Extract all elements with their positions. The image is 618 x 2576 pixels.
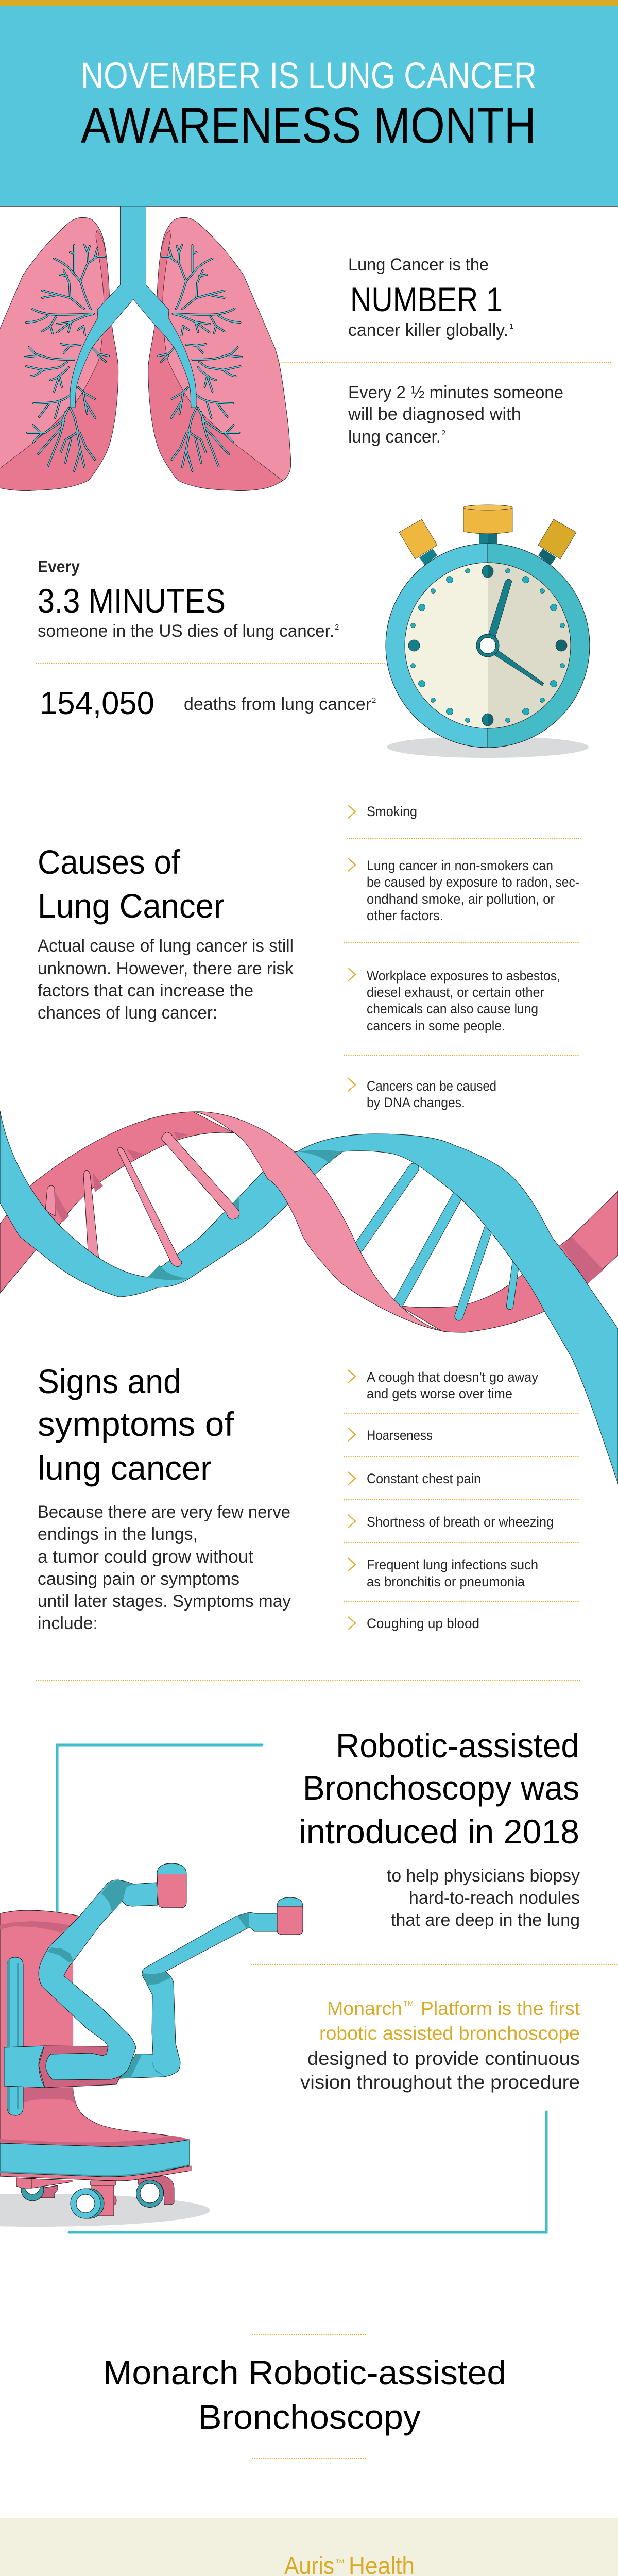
text: Monarch platform: robotic assisted bronchoscope [319, 2023, 580, 2044]
wheel back [16, 2178, 72, 2201]
list item: non-smokers: other factors. [367, 908, 443, 923]
heading: signs and symptoms: lung cancer [38, 1449, 212, 1487]
text: number 1 cancer killer: NUMBER 1 [350, 280, 503, 318]
text: every 3.3 minutes: 3.3 MINUTES [38, 582, 226, 620]
text: to help physicians: hard-to-reach nodules [409, 1888, 580, 1908]
heading: Monarch robotic-assisted bronchoscopy: Monarch Robotic-assisted [103, 2353, 506, 2392]
title: NOVEMBER IS LUNG CANCER [81, 56, 537, 96]
illustration: DNA helix [0, 1111, 618, 1484]
text: every 2.5 minutes: Every 2 ½ minutes someone [348, 383, 563, 402]
text: every 2.5 minutes: will be diagnosed with [348, 404, 521, 424]
text: to help physicians: that are deep in the lung [391, 1910, 580, 1930]
symptom: hoarseness: Hoarseness [367, 1428, 433, 1443]
panel: Auris Health [0, 2518, 618, 2576]
symptom: shortness of breath: Shortness of breath or wheezing [367, 1514, 554, 1530]
symptoms list [344, 1369, 579, 1631]
list item: DNA changes: by DNA changes. [367, 1095, 465, 1110]
symptom: lung infections: as bronchitis or pneumonia [367, 1574, 525, 1589]
list item: workplace exposures: diesel exhaust, or certain other [367, 985, 544, 1000]
text: causes intro [38, 936, 294, 1023]
text: Monarch platform: Monarch [327, 1998, 402, 2019]
text: Monarch platform: designed to provide continuous [307, 2048, 580, 2069]
icon: stopwatch [386, 505, 590, 758]
text: every 3.3 minutes [38, 557, 339, 641]
robot base [0, 2140, 191, 2181]
heading: signs and symptoms: symptoms of [38, 1405, 234, 1443]
table [4, 2046, 136, 2088]
text: signs intro: causing pain or symptoms [38, 1569, 239, 1589]
text: deaths statistic: 2 [372, 696, 376, 705]
text: signs intro: endings in the lungs, [38, 1524, 198, 1544]
list item: DNA changes [348, 1078, 496, 1110]
symptom: lung infections: Frequent lung infections such [367, 1557, 538, 1572]
list item: smoking: Smoking [367, 804, 417, 819]
heading: causes of lung cancer: Lung Cancer [38, 887, 225, 925]
heading: signs and symptoms [38, 1362, 234, 1487]
text: to help physicians [387, 1866, 580, 1930]
heading: Monarch robotic-assisted bronchoscopy [103, 2353, 506, 2436]
text: every 3.3 minutes: Every [38, 557, 80, 576]
illustration: robot [0, 1863, 303, 2227]
text: causes intro: Actual cause of lung cancer is still [38, 936, 294, 956]
text: every 2.5 minutes: lung cancer. [348, 427, 441, 447]
list item: non-smokers: Lung cancer in non-smokers can [367, 858, 553, 873]
text: signs intro [38, 1502, 291, 1633]
heading: robotic-assisted bronchoscopy introduced: introduced in 2018 [299, 1812, 579, 1851]
illustration: lungs [0, 206, 291, 490]
text: every 3.3 minutes: 2 [335, 623, 339, 632]
text: every 2.5 minutes: 2 [441, 429, 445, 437]
list item: non-smokers: ondhand smoke, air pollution, or [367, 891, 555, 907]
wheel right [136, 2176, 174, 2207]
symptom: chest pain: Constant chest pain [367, 1471, 481, 1486]
robot body [0, 1910, 189, 2147]
list item: non-smokers [348, 858, 579, 923]
text: causes intro: chances of lung cancer: [38, 1003, 217, 1023]
wheel front [71, 2181, 116, 2218]
list item: smoking [348, 804, 417, 819]
text: Monarch platform [300, 1998, 580, 2093]
title banner [0, 6, 618, 206]
list item: workplace exposures: chemicals can also cause lung [367, 1001, 538, 1016]
symptom: cough: A cough that doesn't go away [367, 1369, 538, 1385]
list item: DNA changes: Cancers can be caused [367, 1078, 496, 1094]
text: deaths statistic: 154,050 [40, 686, 154, 721]
text: Auris launched [284, 2552, 491, 2576]
symptom: coughing up blood: Coughing up blood [367, 1616, 479, 1631]
text: signs intro: a tumor could grow without [38, 1547, 254, 1567]
arm: left [39, 1863, 186, 2080]
text: signs intro: include: [38, 1614, 98, 1633]
title: AWARENESS MONTH [81, 97, 536, 154]
symptom: cough: and gets worse over time [367, 1386, 512, 1401]
text: Monarch platform: TM [403, 1999, 414, 2007]
text: signs intro: Because there are very few nerve [38, 1502, 290, 1522]
text: deaths statistic: deaths from lung cancer [184, 694, 371, 714]
bracket line: robot top [57, 1745, 262, 1912]
list item: workplace exposures [348, 968, 560, 1033]
text: signs intro: until later stages. Symptoms may [38, 1591, 291, 1611]
text: deaths statistic [40, 686, 376, 721]
heading: Monarch robotic-assisted bronchoscopy: Bronchoscopy [198, 2398, 421, 2436]
text: to help physicians: to help physicians biopsy [387, 1866, 580, 1886]
text: number 1 cancer killer: 1 [509, 322, 513, 331]
list item: workplace exposures: cancers in some people. [367, 1018, 505, 1033]
arm: right [120, 1897, 303, 2078]
list item: non-smokers: be caused by exposure to radon, sec- [367, 874, 579, 890]
text: Monarch platform: vision throughout the procedure [300, 2072, 580, 2093]
text: number 1 cancer killer: cancer killer globally. [348, 320, 508, 340]
symptom: cough [348, 1369, 538, 1401]
heading: robotic-assisted bronchoscopy introduced: Bronchoscopy was [303, 1769, 579, 1807]
title [81, 56, 537, 154]
heading: causes of lung cancer [38, 843, 225, 925]
text: causes intro: factors that can increase the [38, 981, 253, 1001]
text: causes intro: unknown. However, there are risk [38, 959, 294, 978]
text: every 2.5 minutes [348, 383, 563, 447]
heading: robotic-assisted bronchoscopy introduced [299, 1726, 579, 1851]
heading: robotic-assisted bronchoscopy introduced: Robotic-assisted [336, 1726, 579, 1765]
text: Monarch platform: Platform is the first [421, 1998, 580, 2019]
text: number 1 cancer killer: Lung Cancer is the [348, 255, 489, 275]
list item: workplace exposures: Workplace exposures to asbestos, [367, 968, 560, 984]
heading: causes of lung cancer: Causes of [38, 843, 181, 881]
text: every 3.3 minutes: someone in the US dies of lung cancer. [38, 621, 334, 641]
text: Auris launched: TM [336, 2558, 344, 2565]
text: number 1 cancer killer [348, 255, 513, 340]
symptom: lung infections [348, 1557, 538, 1589]
top gold bar [0, 0, 618, 6]
bracket line: robot bottom [69, 2112, 546, 2232]
heading: signs and symptoms: Signs and [38, 1362, 181, 1400]
